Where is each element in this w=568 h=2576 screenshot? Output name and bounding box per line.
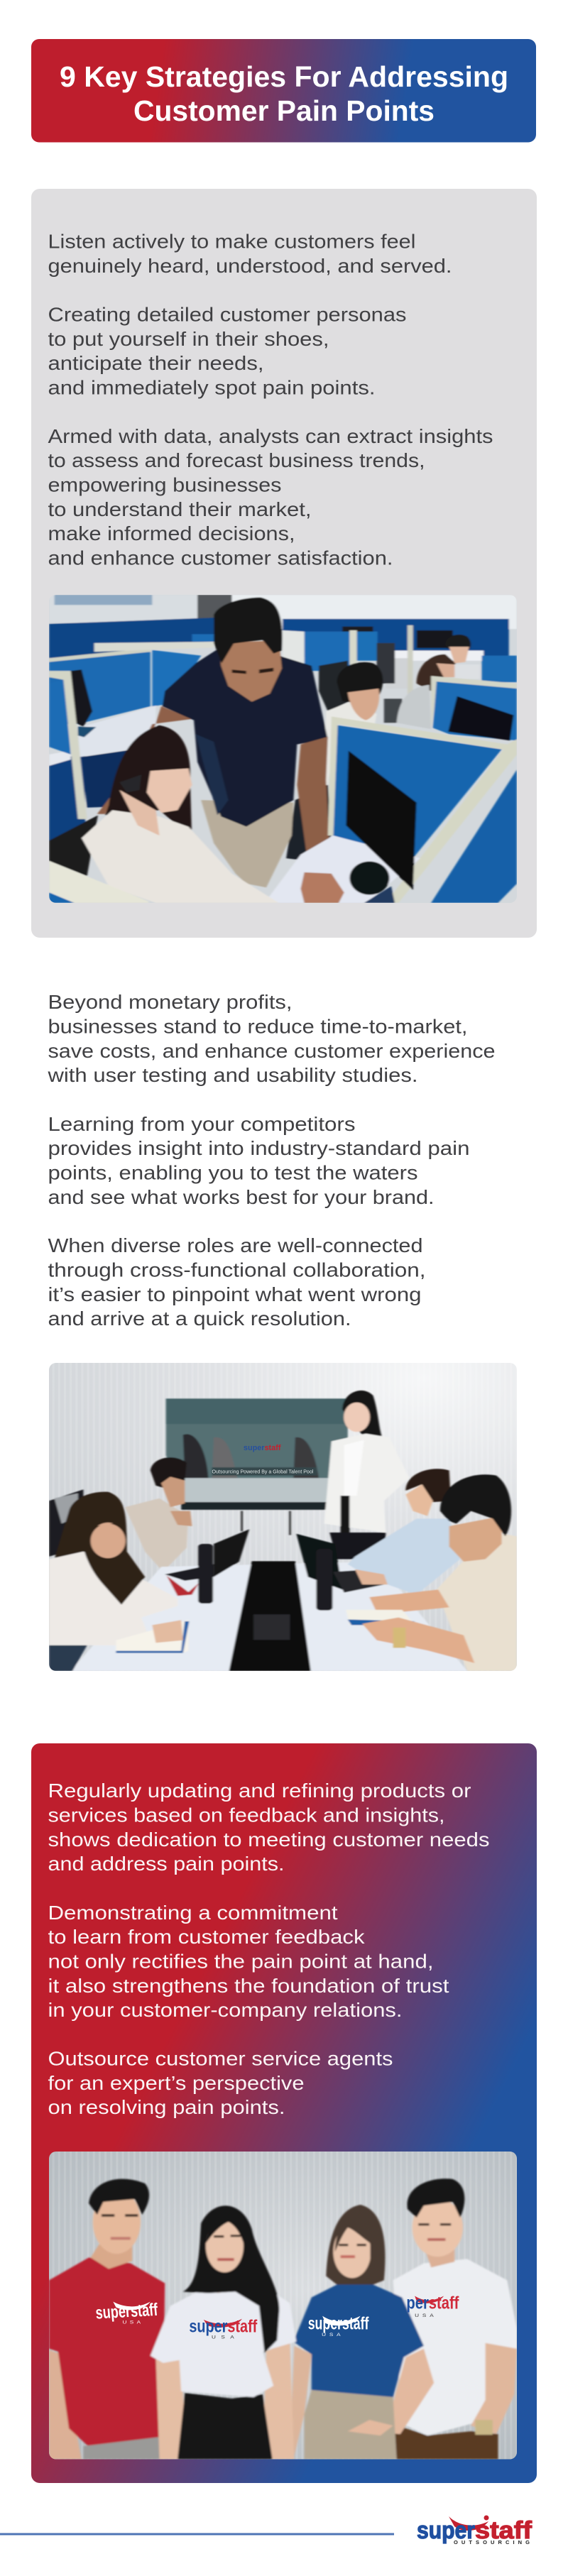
shirt logo: white shirt: superstaff <box>189 2317 258 2337</box>
panel: user testing, competitors and collaboration <box>47 991 517 1671</box>
text block: customer personas: Creating detailed customer personas <box>48 304 406 325</box>
shirt logo: white shirt right: perstaff <box>406 2293 459 2313</box>
text block: outsource agents: for an expert’s perspective <box>48 2072 305 2094</box>
text block: commitment to feedback: in your customer-company relations. <box>48 1999 402 2021</box>
text block: listen actively: genuinely heard, understood, and served. <box>48 255 452 277</box>
text block: commitment to feedback: to learn from customer feedback <box>48 1926 366 1948</box>
text block: outsource agents: Outsource customer service agents <box>48 2047 393 2070</box>
shirt logo: white shirt right: USA <box>415 2313 434 2318</box>
text block: outsource agents: on resolving pain points. <box>48 2096 285 2118</box>
text block: data analysts: to assess and forecast business trends, <box>48 449 425 471</box>
text block: user testing: businesses stand to reduce time-to-market, <box>48 1015 468 1038</box>
logo: superstaff outsourcing <box>417 2516 532 2545</box>
text block: user testing: Beyond monetary profits, <box>48 991 293 1013</box>
shirt logo: blue shirt: superstaff <box>308 2314 369 2334</box>
text block: commitment to feedback: it also strengthens the foundation of trust <box>48 1975 449 1997</box>
text block: data analysts: and enhance customer satisfaction. <box>48 547 393 569</box>
text block: commitment to feedback: not only rectifies the pain point at hand, <box>48 1951 433 1972</box>
photo: four staff members in branded shirts <box>49 2152 517 2459</box>
title banner <box>31 39 536 142</box>
shirt logo: red shirt <box>96 2301 158 2324</box>
shirt logo: blue shirt <box>308 2315 369 2336</box>
panel: continuous improvement, trust and outsourcing <box>31 1743 537 2483</box>
text block: cross-functional collaboration: When diverse roles are well-connected <box>48 1234 423 1256</box>
text block: cross-functional collaboration: through cross-functional collaboration, <box>48 1259 426 1281</box>
text block: listen actively: Listen actively to make customers feel <box>48 230 416 253</box>
text block: user testing: save costs, and enhance customer experience <box>48 1040 496 1062</box>
logo dot <box>484 2516 488 2520</box>
text block: customer personas: and immediately spot pain points. <box>48 376 375 399</box>
panel: listening, personas and data <box>31 189 537 938</box>
photo: team meeting at conference table <box>49 1363 517 1671</box>
text block: data analysts: empowering businesses <box>48 474 281 495</box>
logo wordmark: staff <box>475 2517 532 2544</box>
tv screen headline: Outsourcing Powered By a Global Talent Pool <box>212 1469 313 1474</box>
text block: learning from competitors: Learning from your competitors <box>48 1113 355 1135</box>
footer rule <box>0 2533 394 2536</box>
text block: updating products: services based on feedback and insights, <box>48 1804 444 1826</box>
shirt logo: red shirt: USA <box>123 2319 141 2325</box>
shirt logo: white shirt: USA <box>212 2334 234 2340</box>
text block: updating products: and address pain points. <box>48 1853 285 1875</box>
title text: Customer Pain Points <box>133 94 435 127</box>
text block: user testing: with user testing and usability studies. <box>47 1064 418 1086</box>
text block: learning from competitors: provides insight into industry-standard pain <box>48 1137 470 1159</box>
text block: commitment to feedback: Demonstrating a commitment <box>48 1902 338 1924</box>
text block: cross-functional collaboration: it’s easier to pinpoint what went wrong <box>48 1283 422 1305</box>
text block: data analysts: to understand their market, <box>48 498 311 520</box>
shirt logo: blue shirt: USA <box>322 2332 341 2337</box>
shirt logo: white shirt <box>190 2318 257 2338</box>
title text: 9 Key Strategies For Addressing <box>60 60 508 93</box>
text block: learning from competitors: points, enabling you to test the waters <box>48 1161 417 1184</box>
shirt logo: red shirt: superstaff <box>94 2300 159 2323</box>
text block: customer personas: to put yourself in their shoes, <box>48 328 329 350</box>
text block: customer personas: anticipate their needs, <box>48 352 264 374</box>
photo: call center agents at cubicles <box>49 595 517 903</box>
logo tagline: OUTSOURCING <box>454 2539 530 2545</box>
shirt logo: white shirt right <box>408 2296 459 2317</box>
text block: updating products: shows dedication to meeting customer needs <box>48 1829 490 1851</box>
text block: data analysts: Armed with data, analysts can extract insights <box>48 425 493 447</box>
logo wordmark: super <box>417 2517 475 2544</box>
logo swoosh <box>449 2516 488 2531</box>
text block: learning from competitors: and see what works best for your brand. <box>48 1186 435 1208</box>
text block: data analysts: make informed decisions, <box>48 522 295 544</box>
text block: cross-functional collaboration: and arrive at a quick resolution. <box>48 1308 351 1330</box>
text block: updating products: Regularly updating and refining products or <box>48 1780 471 1802</box>
tv screen logo: superstaff <box>244 1443 281 1452</box>
